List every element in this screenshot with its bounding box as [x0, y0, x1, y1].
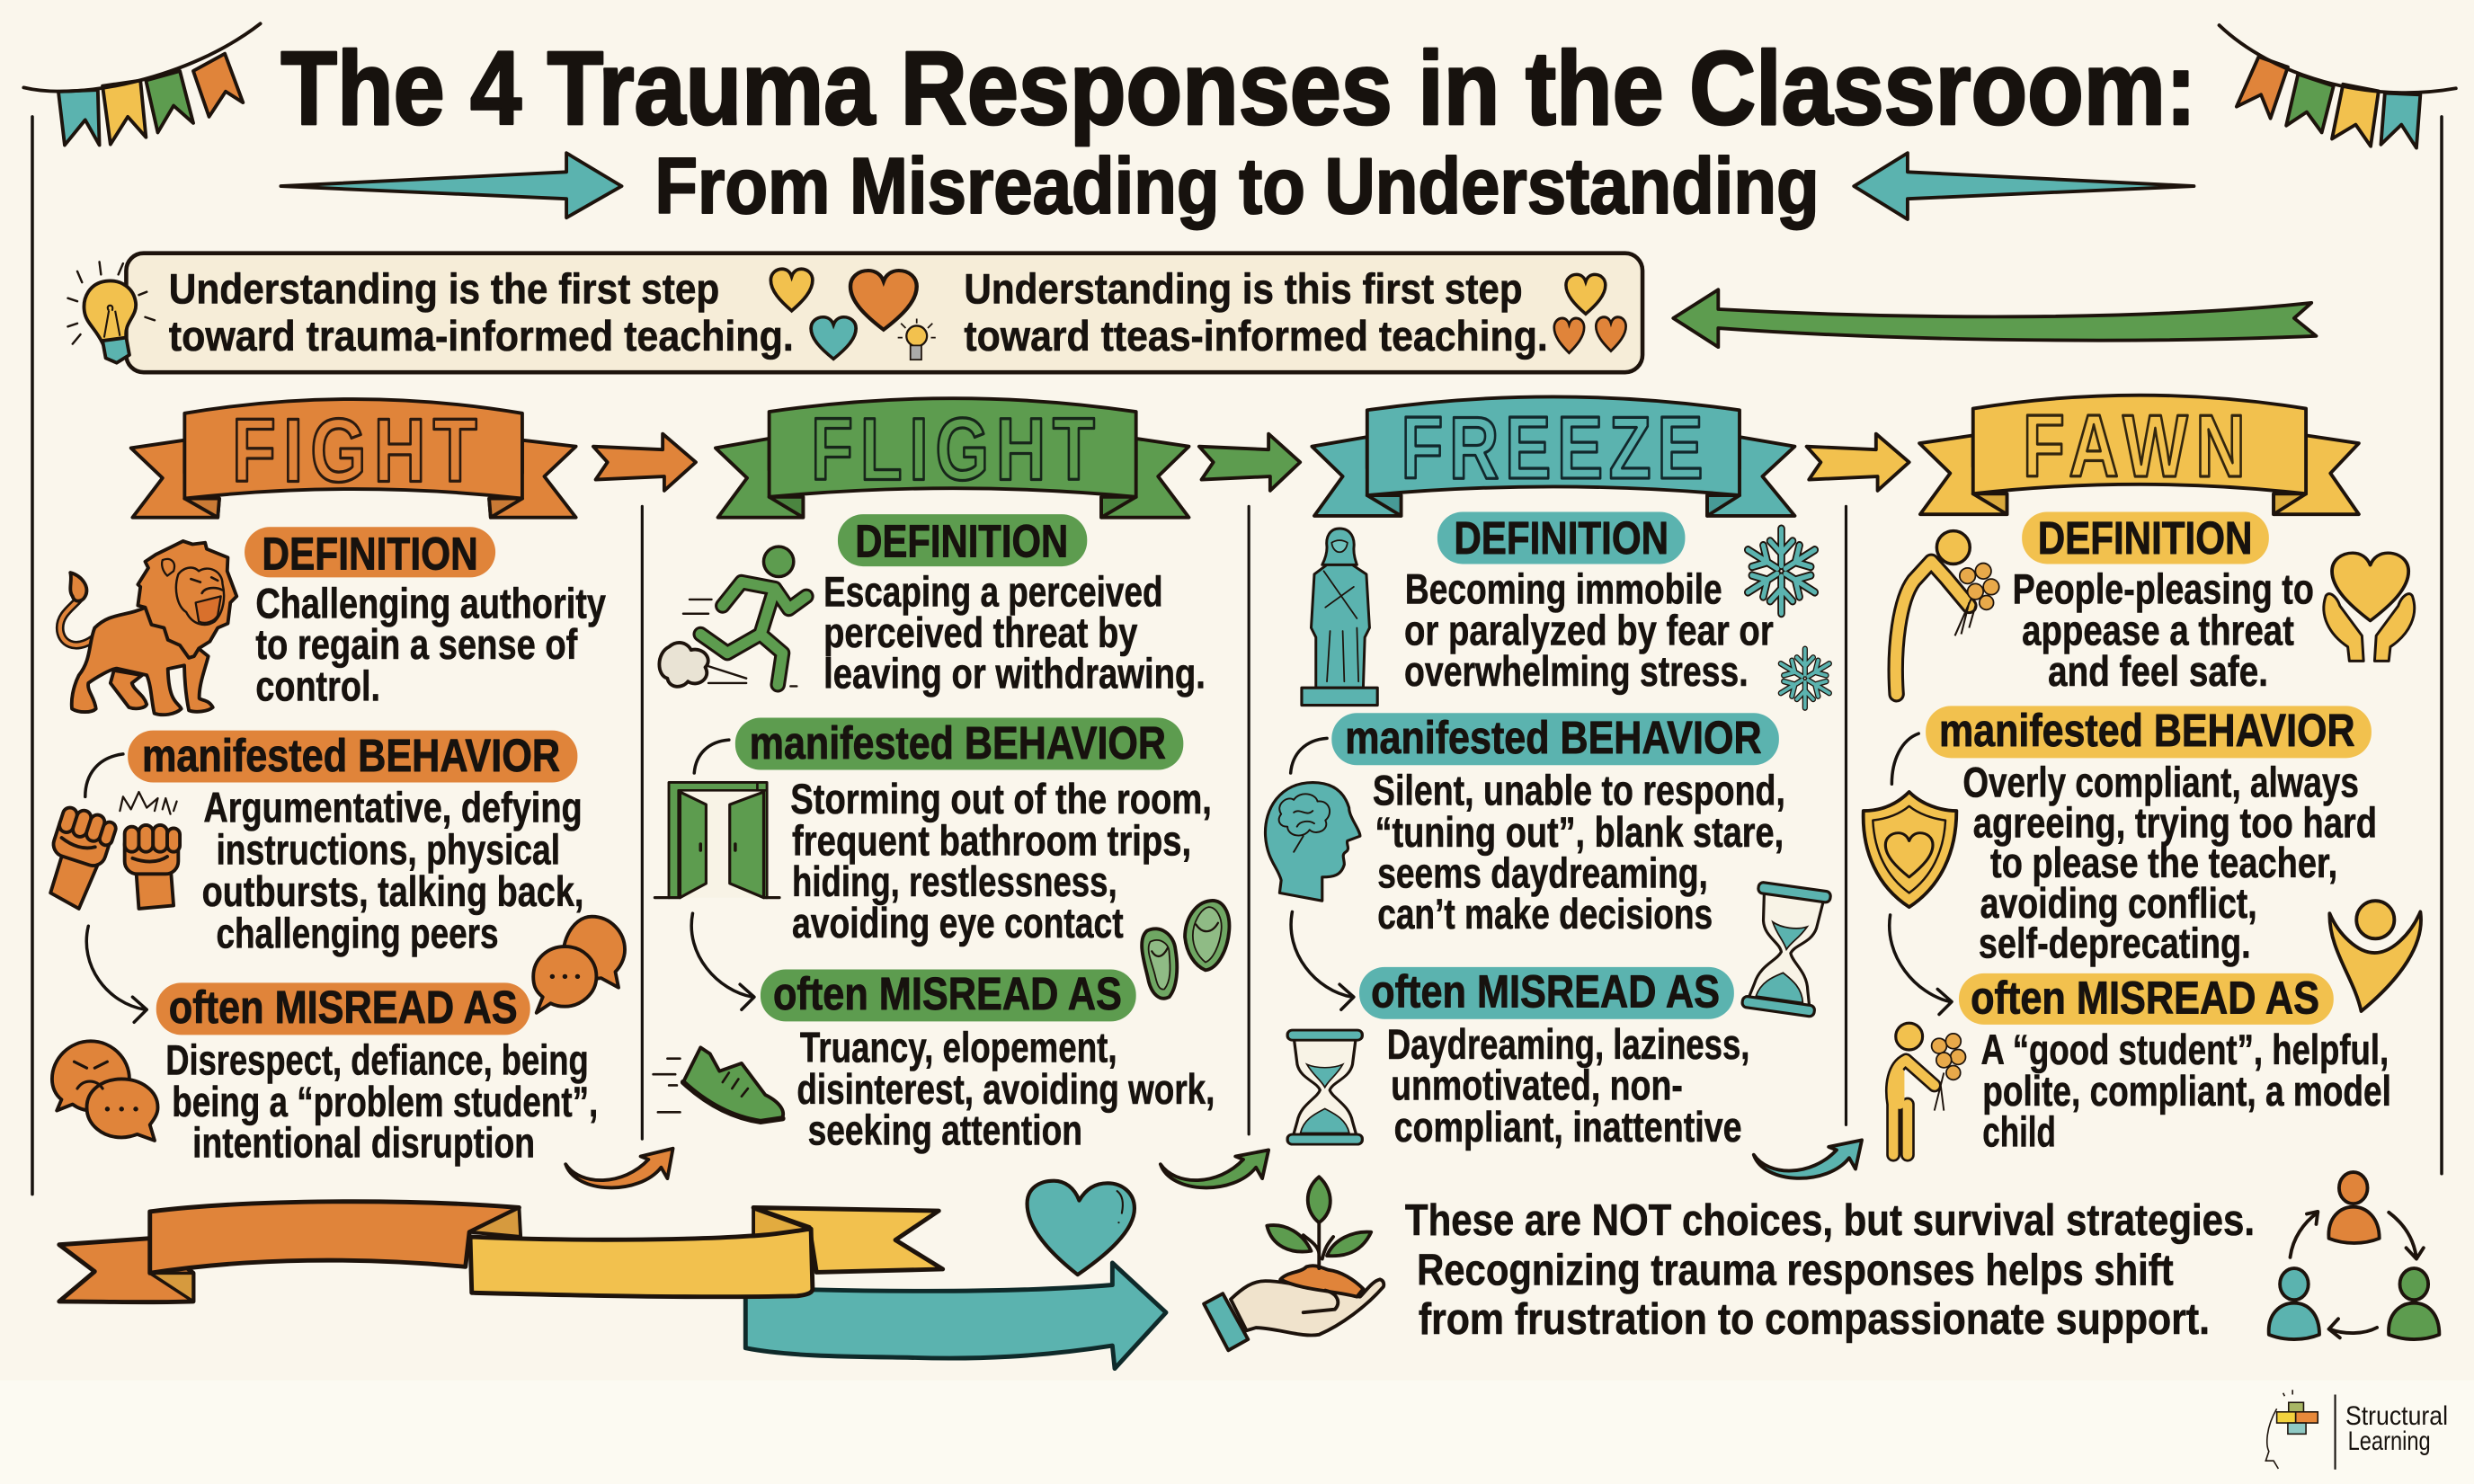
definition pill: DEFINITION — [855, 516, 1068, 567]
definition text: Challenging authority — [255, 580, 606, 627]
icon: hourglass tilted — [1741, 882, 1831, 1017]
behavior text: avoiding conflict, — [1980, 880, 2257, 928]
ribbon yellow fold — [753, 1208, 810, 1237]
behavior text: challenging peers — [216, 910, 499, 957]
icon: hand holding plant — [1204, 1177, 1384, 1350]
behavior pill: manifested BEHAVIOR — [750, 717, 1166, 769]
ribbon orange main — [150, 1202, 519, 1273]
icon: shield with heart — [1864, 792, 1956, 907]
callout text left — [169, 265, 794, 360]
misread pill: often MISREAD AS — [773, 968, 1122, 1019]
ribbon orange tail — [59, 1239, 193, 1302]
definition pill: DEFINITION — [2038, 512, 2252, 564]
connector: to behavior — [85, 754, 123, 796]
definition text: to regain a sense of — [255, 621, 578, 669]
ribbon yellow main — [470, 1229, 813, 1297]
logo: structural learning: Learning — [2348, 1426, 2431, 1456]
banner text FIGHT: FIGHT — [232, 401, 485, 501]
icon: small snowflake — [1776, 649, 1833, 708]
misread text — [1387, 1021, 1749, 1151]
arrow: flight to freeze — [1199, 434, 1300, 491]
icon: fists — [50, 792, 180, 909]
arrow: freeze to fawn — [1807, 434, 1909, 491]
behavior text: Overly compliant, always — [1962, 760, 2359, 807]
banner text FAWN: FAWN — [2023, 396, 2254, 495]
behavior pill: manifested BEHAVIOR — [1939, 705, 2354, 756]
icon: people cycle — [2269, 1172, 2439, 1339]
panel: fight — [50, 527, 673, 1187]
closing message: These are NOT choices, but survival strategies. — [1405, 1196, 2255, 1245]
behavior text: Argumentative, defying — [203, 785, 583, 832]
behavior text: agreeing, trying too hard — [1973, 799, 2377, 847]
connector: to misread — [1890, 915, 1952, 1015]
misread text: child — [1982, 1108, 2056, 1156]
logo: structural learning: Structural — [2345, 1401, 2448, 1431]
icon: orange heart right b — [1596, 317, 1626, 351]
soil — [1280, 1266, 1363, 1297]
misread text: Disrespect, defiance, being — [165, 1037, 589, 1085]
arrow: curved orange — [565, 1149, 673, 1187]
behavior text: Storming out of the room, — [790, 776, 1212, 823]
banner text FREEZE: FREEZE — [1402, 398, 1709, 497]
icon: running shoe — [654, 1047, 783, 1122]
arrow: subtitle right — [1854, 153, 2194, 219]
icon: bowing figure with flowers — [1896, 531, 1999, 694]
icon: orange heart — [850, 271, 917, 330]
behavior text — [1373, 767, 1785, 938]
icon: head with brain — [1265, 783, 1360, 901]
misread text: Truancy, elopement, — [800, 1025, 1117, 1072]
banner text FLIGHT: FLIGHT — [811, 399, 1102, 499]
ribbon upper fold — [469, 1208, 521, 1237]
definition pill: DEFINITION — [262, 529, 478, 580]
connector: to misread — [1291, 911, 1354, 1009]
behavior text: hiding, restlessness, — [792, 858, 1117, 906]
misread text — [165, 1037, 598, 1168]
sleeve — [1204, 1293, 1248, 1350]
icon: big snowflake — [1742, 529, 1820, 614]
definition text: control. — [255, 663, 380, 711]
banner: FAWN — [1919, 395, 2359, 514]
banner: FREEZE — [1312, 396, 1794, 516]
hand — [1231, 1279, 1384, 1336]
closing message: from frustration to compassionate support. — [1419, 1295, 2210, 1344]
callout text right: toward tteas-informed teaching. — [964, 313, 1548, 360]
definition text: Becoming immobile — [1405, 566, 1722, 614]
definition text: perceived threat by — [823, 609, 1138, 657]
misread text — [1981, 1026, 2391, 1156]
icon: yellow heart — [770, 269, 813, 311]
arrow: curved green — [1161, 1150, 1268, 1187]
misread text: disinterest, avoiding work, — [796, 1066, 1215, 1114]
misread text: compliant, inattentive — [1394, 1104, 1742, 1151]
callout text right: Understanding is this first step — [964, 265, 1523, 313]
behavior text: “tuning out”, blank stare, — [1375, 809, 1784, 857]
misread text: seeking attention — [808, 1107, 1082, 1155]
bunting: right — [2220, 25, 2456, 148]
closing message — [1405, 1196, 2255, 1344]
icon: angry bubbles — [52, 1041, 158, 1141]
behavior text: Silent, unable to respond, — [1373, 767, 1785, 814]
icon: running figure — [659, 547, 806, 687]
icon: orange heart right a — [1554, 318, 1584, 353]
bunting: left — [23, 23, 261, 145]
closing message: Recognizing trauma responses helps shift — [1417, 1247, 2174, 1295]
behavior text: can’t make decisions — [1377, 891, 1713, 938]
definition pill: DEFINITION — [1454, 512, 1669, 564]
ribbon orange fold — [150, 1273, 193, 1302]
behavior pill: manifested BEHAVIOR — [1345, 712, 1762, 763]
behavior text — [790, 776, 1212, 947]
logo mark — [2265, 1390, 2318, 1469]
icon: open door — [654, 783, 779, 898]
callout text right — [964, 265, 1548, 360]
arrow: teal — [745, 1263, 1166, 1369]
definition text: or paralyzed by fear or — [1404, 607, 1774, 654]
ribbon: bottom left orange, yellow, teal arrow — [59, 1202, 1166, 1369]
subtitle: From Misreading to Understanding — [654, 142, 1820, 230]
arrow: fight to flight — [593, 434, 696, 491]
definition text — [255, 580, 606, 711]
arrow: callout — [1673, 289, 2316, 347]
behavior text: to please the teacher, — [1990, 840, 2337, 887]
behavior text: seems daydreaming, — [1377, 850, 1708, 898]
arrow: subtitle left — [280, 153, 622, 218]
icon: speech bubbles — [533, 917, 625, 1013]
behavior text — [202, 785, 583, 957]
arrow: curved teal — [1754, 1140, 1862, 1178]
definition text: Escaping a perceived — [823, 568, 1163, 616]
icon: flip flops — [1142, 901, 1229, 999]
definition text: leaving or withdrawing. — [823, 651, 1206, 698]
misread pill: often MISREAD AS — [169, 982, 518, 1033]
definition text: appease a threat — [2022, 607, 2294, 654]
connector: to behavior — [1291, 738, 1327, 773]
logo: structural learning — [2265, 1390, 2448, 1470]
callout: understanding — [67, 253, 1642, 372]
icon: small bulb — [898, 319, 936, 360]
callout text left: Understanding is the first step — [169, 265, 719, 313]
icon: light bulb — [67, 262, 155, 363]
behavior pill: manifested BEHAVIOR — [142, 730, 560, 781]
icon: yellow heart right — [1566, 274, 1606, 314]
panel: flight — [654, 514, 1268, 1187]
misread text: Daydreaming, laziness, — [1387, 1021, 1749, 1069]
definition text: overwhelming stress. — [1404, 648, 1749, 696]
icon: teal heart — [1028, 1181, 1135, 1275]
connector: to behavior — [694, 740, 729, 773]
misread text — [796, 1025, 1215, 1155]
misread text: intentional disruption — [192, 1120, 535, 1168]
panel: fawn — [1864, 512, 2421, 1156]
banner: FIGHT — [131, 399, 576, 518]
ribbon yellow tail — [753, 1208, 943, 1272]
behavior text: self-deprecating. — [1979, 920, 2251, 968]
column dividers — [642, 506, 1846, 1139]
definition text — [2013, 566, 2314, 696]
behavior text: frequent bathroom trips, — [792, 818, 1191, 866]
icon: figure with raised arms — [2329, 901, 2421, 1011]
connector: to misread — [691, 913, 754, 1009]
misread text: unmotivated, non- — [1391, 1062, 1683, 1110]
connector: to misread — [86, 926, 147, 1022]
icon: lion — [60, 541, 236, 715]
icon: statue — [1302, 529, 1377, 706]
title: The 4 Trauma Responses in the Classroom: — [280, 30, 2196, 147]
icon: figure with bouquet — [1892, 1023, 1966, 1155]
behavior text: avoiding eye contact — [792, 900, 1124, 947]
behavior text: outbursts, talking back, — [202, 868, 583, 916]
definition text — [1404, 566, 1774, 696]
callout text left: toward trauma-informed teaching. — [169, 313, 794, 360]
plant — [1267, 1177, 1371, 1268]
connector: to behavior — [1891, 733, 1918, 784]
definition text — [823, 568, 1206, 698]
banner: FLIGHT — [716, 398, 1188, 518]
definition text: and feel safe. — [2048, 648, 2268, 696]
panel: freeze — [1265, 512, 1862, 1178]
behavior text — [1962, 760, 2377, 968]
misread pill: often MISREAD AS — [1971, 973, 2319, 1024]
icon: heart in hands — [2324, 553, 2415, 661]
icon: hourglass — [1287, 1030, 1362, 1144]
misread pill: often MISREAD AS — [1371, 966, 1720, 1017]
behavior text: instructions, physical — [216, 826, 560, 874]
misread text: being a “problem student”, — [172, 1079, 598, 1126]
icon: teal heart — [811, 317, 856, 359]
page frame lines — [32, 117, 2442, 1195]
definition text: People-pleasing to — [2013, 566, 2314, 614]
